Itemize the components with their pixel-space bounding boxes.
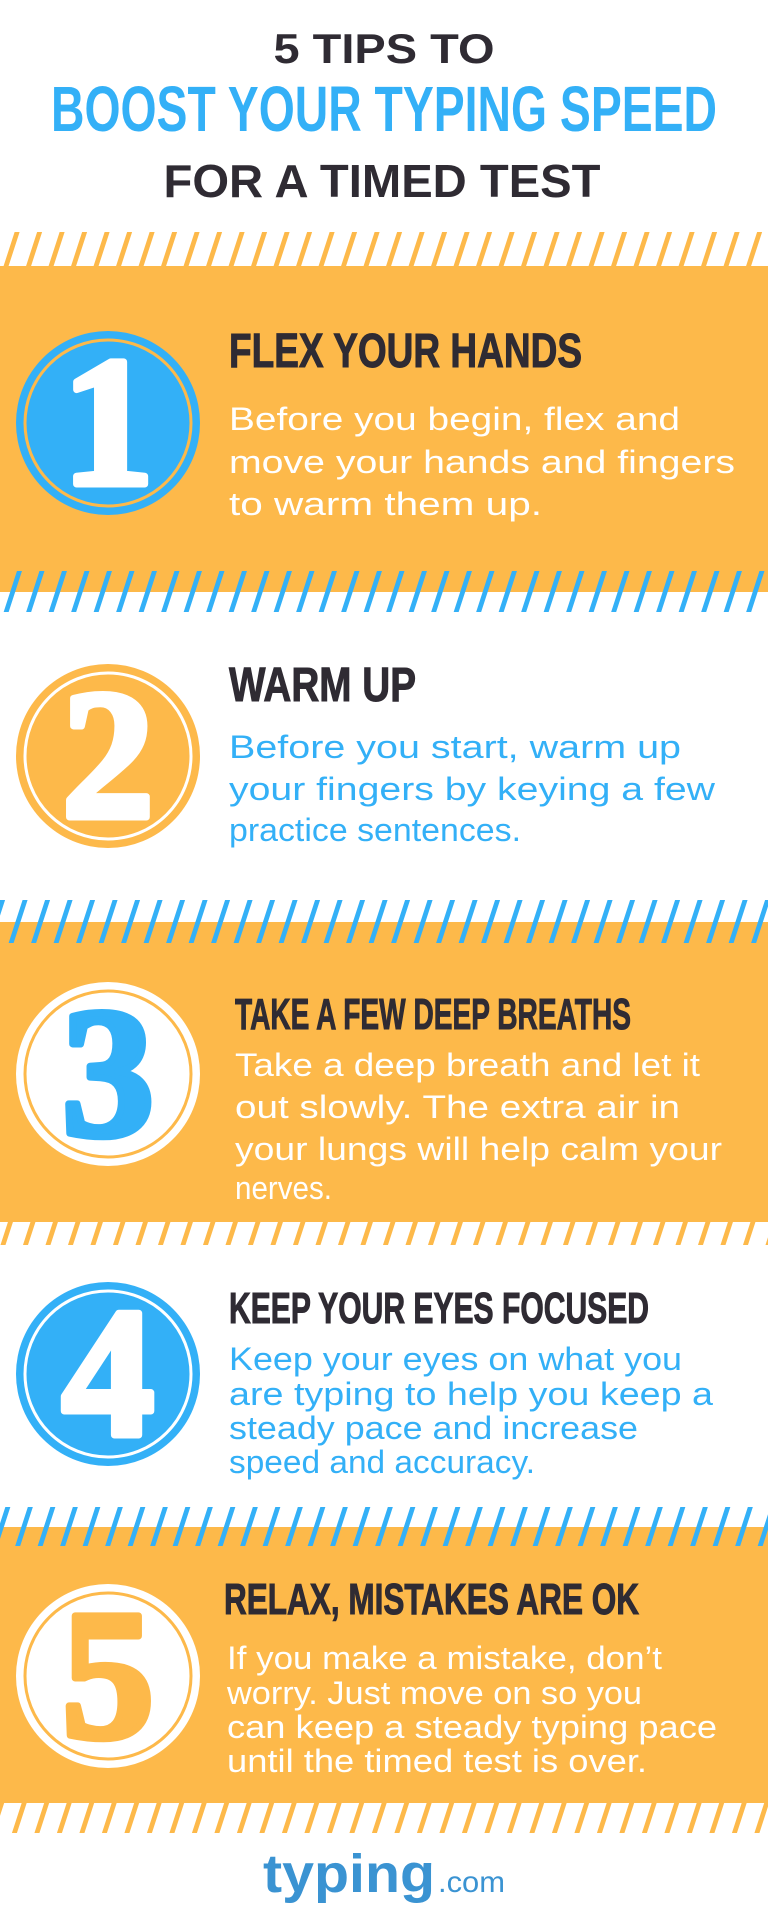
panel: tip 4: are typing to help you keep a xyxy=(229,1376,713,1412)
icon: number 5: 5 xyxy=(62,1573,154,1778)
icon: number 1 xyxy=(16,320,200,525)
panel: tip 2: practice sentences. xyxy=(229,812,521,848)
panel: tip 4: Keep your eyes on what you xyxy=(229,1341,682,1377)
logo: typing xyxy=(263,1844,435,1904)
panel: tip 2: Before you start, warm up xyxy=(229,729,681,765)
icon: number 4 xyxy=(16,1271,200,1476)
panel: tip 5 xyxy=(16,1573,717,1779)
panel: tip 3: Take a deep breath and let it xyxy=(235,1047,700,1083)
panel: tip 3: out slowly. The extra air in xyxy=(235,1089,680,1125)
icon: number 4: 4 xyxy=(62,1271,154,1476)
icon: number 2: 2 xyxy=(62,653,154,858)
title xyxy=(51,25,717,207)
panel: tip 5: If you make a mistake, don’t xyxy=(227,1640,662,1676)
panel: tip 1: move your hands and fingers xyxy=(229,444,735,480)
title: 5 TIPS TO xyxy=(274,25,494,72)
icon: number 2 xyxy=(16,653,200,858)
panel: tip 4: steady pace and increase xyxy=(229,1410,638,1446)
panel: tip 3: nerves. xyxy=(235,1170,332,1206)
icon: number 1: 1 xyxy=(62,320,154,525)
logo xyxy=(263,1844,505,1904)
icon: number 3 xyxy=(16,971,200,1176)
panel: tip 2: WARM UP xyxy=(229,659,416,712)
panel: tip 1: to warm them up. xyxy=(229,486,542,522)
panel: tip 3 xyxy=(16,971,722,1206)
panel: tip 2: your fingers by keying a few xyxy=(229,771,716,807)
panel: tip 4: speed and accuracy. xyxy=(229,1444,535,1480)
icon: number 5 xyxy=(16,1573,200,1778)
panel: tip 5: can keep a steady typing pace xyxy=(227,1709,717,1745)
logo: .com xyxy=(438,1866,505,1899)
panel: tip 3: your lungs will help calm your xyxy=(235,1131,722,1167)
panel: tip 5: worry. Just move on so you xyxy=(226,1675,642,1711)
panel: tip 5: until the timed test is over. xyxy=(227,1743,647,1779)
panel: tip 4 xyxy=(16,1271,713,1480)
panel: tip 1: Before you begin, flex and xyxy=(229,401,680,437)
panel: tip 1 xyxy=(16,320,735,525)
icon: number 3: 3 xyxy=(62,971,154,1176)
panel: tip 1: FLEX YOUR HANDS xyxy=(229,325,582,378)
title: FOR A TIMED TEST xyxy=(164,155,600,207)
panel: tip 2 xyxy=(16,653,716,858)
